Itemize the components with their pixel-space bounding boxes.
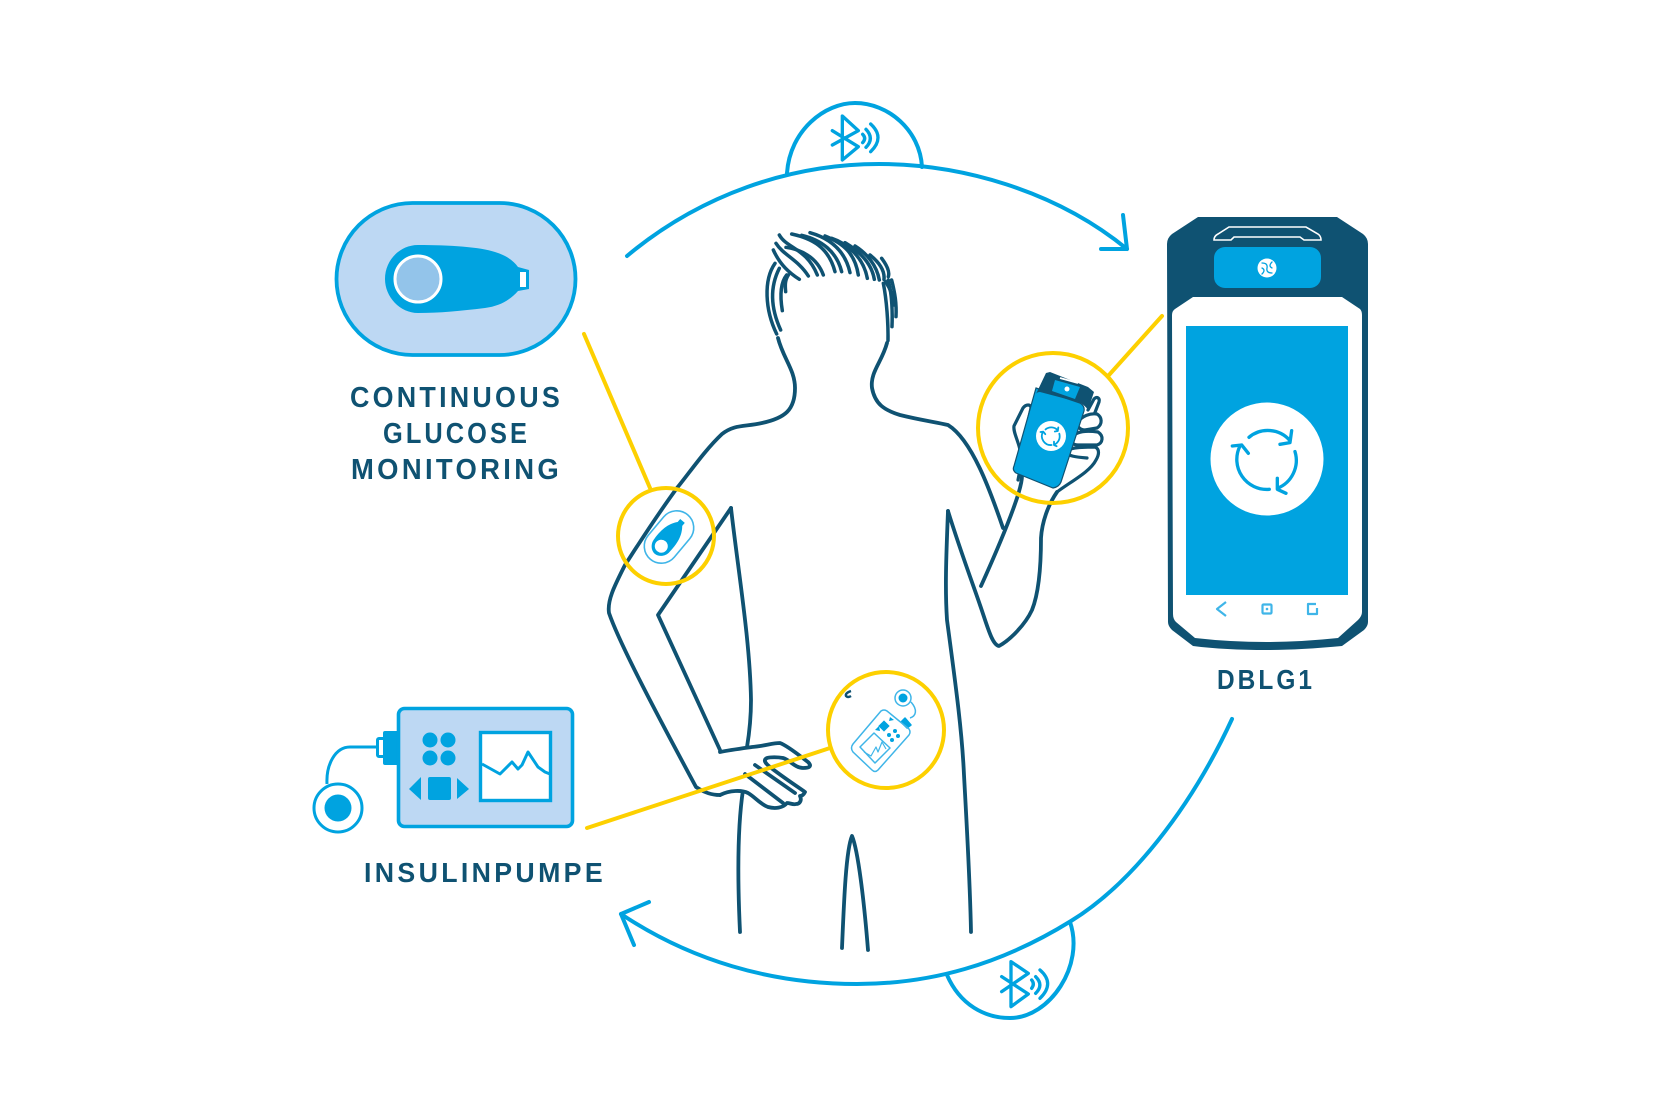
icon: mini sensor [637,504,701,570]
figure: inner left arm [658,508,731,750]
icon: mini sync arrows [1040,427,1060,446]
icon: mini handset display [1052,380,1080,399]
figure: finger lines [745,765,795,803]
panel: insulin pump [314,708,606,888]
figure: hair [767,233,896,341]
icon: mini sync badge [1036,421,1066,451]
figure: legs gap [842,836,868,950]
arrow: bottom bluetooth arc to insulin pump [621,719,1232,984]
figure: right forearm outer [948,492,1057,646]
heading: insulinpumpe: INSULINPUMPE [364,857,606,888]
icon: sensor dial [395,256,441,302]
icon: device face [1172,297,1362,642]
figure: left torso lower [738,790,743,932]
callout: yellow connector lines [584,316,1162,828]
icon: device shell [1167,217,1368,650]
arrow: top bluetooth arc to DBLG1 [627,164,1127,256]
callout: pump on waist [828,672,944,788]
heading: DBLG1: DBLG1 [1217,664,1315,695]
icon: pump connector [383,731,399,765]
icon: sensor connector window [520,272,526,287]
figure: right side of neck, shoulder [872,343,1003,528]
icon: mini handset speaker [1060,378,1078,383]
icon: bottom bluetooth signal [947,922,1074,1018]
callout ring: pump [828,672,944,788]
chart: pump glucose display [480,732,550,800]
icon: pump connector tip [378,738,384,756]
figure: left torso upper [731,508,751,747]
icon: sync arrows [1232,430,1296,493]
figure: right forearm inner [981,476,1022,586]
heading: continuous glucose monitoring: MONITORING [351,454,562,486]
icon: device top display [1214,247,1321,288]
figure: small mark [846,691,851,697]
icon: mini handset logo dot [1064,386,1070,392]
icon: screen sync badge [1210,402,1324,516]
icon: infusion cable [327,747,376,784]
callout: sensor on arm [618,488,714,584]
callout: handset in hand [978,353,1128,503]
panel: DBLG1 handset [1167,217,1368,695]
icon: mini handset head [1036,372,1094,410]
heading: continuous glucose monitoring: CONTINUOUS [350,382,563,414]
figure: right torso [946,511,971,932]
figure: left side of neck, shoulder and outer arm [609,338,795,795]
panel: person figure outline [609,233,1057,950]
figure: fingers and palm [1014,398,1102,492]
icon: sensor body [385,245,529,313]
figure: hand behind back [720,743,810,808]
icon: infusion set centre [324,794,352,822]
icon: pump buttons [409,732,469,800]
icon: top bluetooth signal [787,103,922,173]
icon: mini pump [852,690,915,772]
icon: device screen [1186,326,1348,595]
heading: continuous glucose monitoring [350,382,563,486]
panel: continuous glucose monitoring [336,203,576,486]
icon: infusion set [314,784,362,832]
callout ring: arm [618,488,714,584]
icon: brand logo [1258,258,1276,278]
heading: continuous glucose monitoring: GLUCOSE [383,418,530,450]
icon: pump body [398,708,572,826]
icon: mini handset body [1013,388,1084,488]
icon: android navigation keys [1217,602,1317,616]
icon: sensor badge [336,203,576,355]
icon: device speaker [1214,227,1321,240]
callout ring: handset [978,353,1128,503]
